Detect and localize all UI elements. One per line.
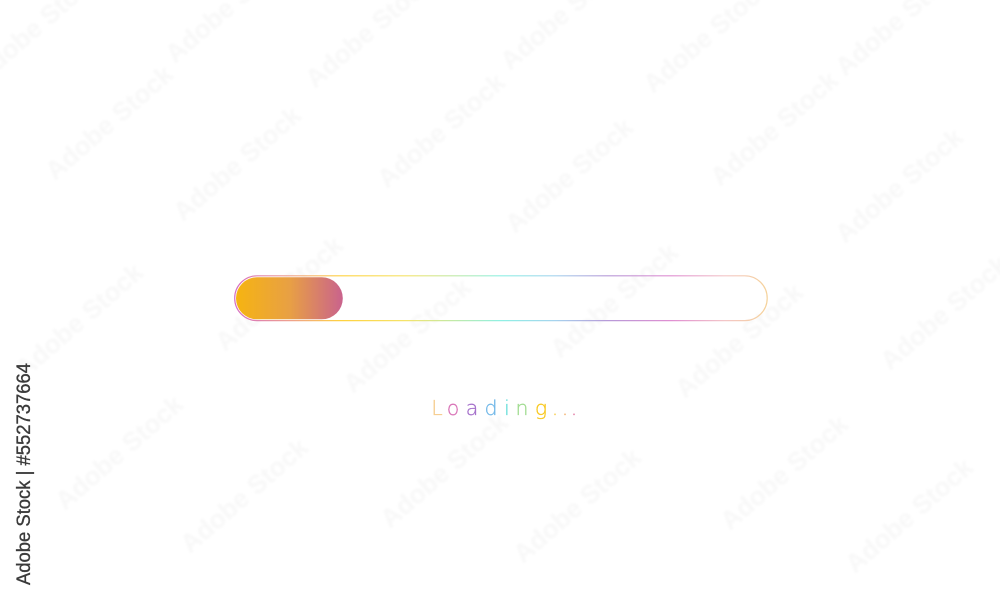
loading label: o (447, 396, 459, 420)
progress bar track outline (235, 276, 767, 321)
watermark pattern: Adobe Stock (209, 229, 349, 357)
watermark pattern: Adobe Stock (374, 406, 514, 534)
watermark pattern: Adobe Stock (39, 58, 179, 186)
watermark pattern: Adobe Stock (49, 388, 189, 516)
loading label: i (504, 396, 510, 420)
loading label: a (466, 396, 478, 420)
watermark pattern: Adobe Stock (544, 236, 684, 364)
watermark pattern: Adobe Stock (714, 408, 854, 536)
progress bar (235, 276, 767, 321)
watermark pattern: Adobe Stock (507, 441, 647, 569)
watermark pattern: Adobe Stock (167, 99, 307, 227)
loading label: . (571, 396, 577, 420)
progress bar fill (236, 277, 343, 319)
loading label: L (431, 396, 443, 420)
loading label: . (562, 396, 568, 420)
loading label: n (516, 396, 528, 420)
watermark pattern: Adobe Stock (337, 271, 477, 399)
watermark pattern: Adobe Stock (9, 256, 149, 384)
watermark pattern: Adobe Stock (174, 431, 314, 559)
stock id vertical text: Adobe Stock | #552737664 (14, 363, 35, 585)
watermark pattern: Adobe Stock (669, 276, 809, 404)
watermark pattern: Adobe Stock (371, 66, 511, 194)
loading label: . (552, 396, 558, 420)
loading label: d (484, 396, 498, 420)
watermark pattern: Adobe Stock (499, 111, 639, 239)
watermark pattern: Adobe Stock (704, 64, 844, 192)
loading label (431, 396, 577, 420)
watermark pattern: Adobe Stock (829, 121, 969, 249)
watermark pattern: Adobe Stock (839, 451, 979, 579)
loading label: g (535, 396, 547, 420)
